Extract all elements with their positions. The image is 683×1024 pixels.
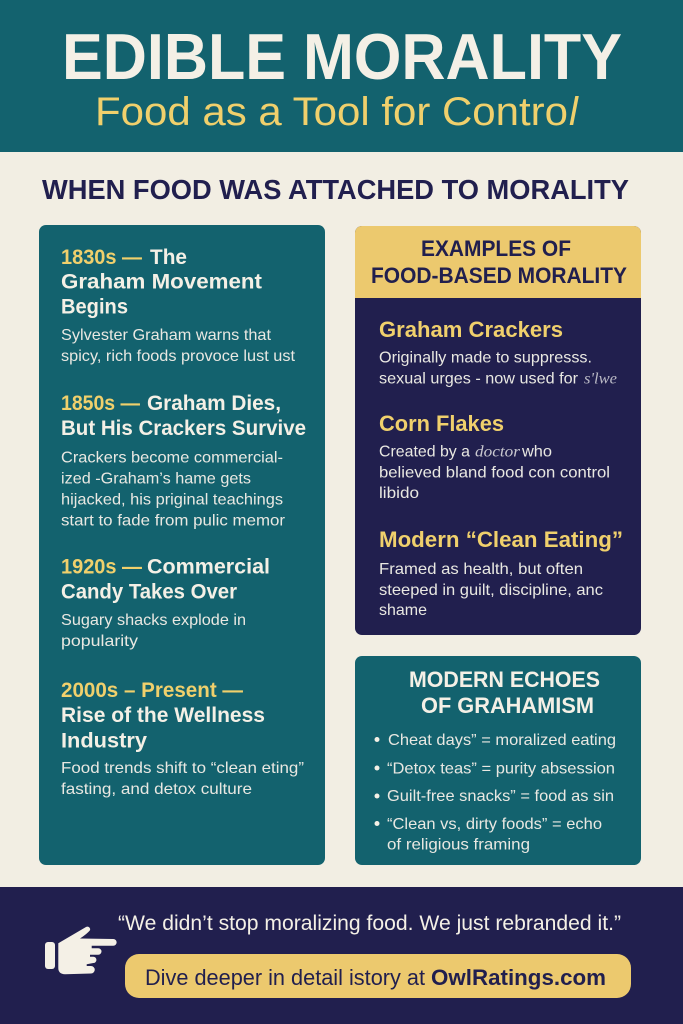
timeline entry: 1920s: Candy Takes Over <box>61 580 238 604</box>
timeline entry: 1850s <box>61 391 306 530</box>
timeline entry: 1850s: 1850s — <box>61 391 140 415</box>
echoes heading: OF GRAHAMISM <box>421 693 594 718</box>
header banner <box>0 0 683 152</box>
timeline entry: 2000s: Rise of the Wellness <box>61 703 265 727</box>
timeline entry: 2000s: Industry <box>61 728 147 752</box>
timeline entry: 1830s: The <box>150 245 187 269</box>
timeline entry: 1850s: But His Crackers Survive <box>61 416 306 440</box>
example: Graham Crackers: Graham Crackers <box>379 317 563 342</box>
example: Corn Flakes: who <box>521 444 552 460</box>
section heading: WHEN FOOD WAS ATTACHED TO MORALITY <box>42 174 629 205</box>
call to action button: Dive deeper in detail istory at <box>145 965 425 990</box>
examples heading: FOOD-BASED MORALITY <box>371 263 627 288</box>
subtitle: Food as a Tool for Contro <box>95 90 568 134</box>
footer band <box>0 887 683 1024</box>
timeline entry: 1850s: Graham Dies, <box>147 391 281 415</box>
timeline entry: 2000s: 2000s – Present — <box>61 678 243 702</box>
example: Corn Flakes: doctor <box>475 444 521 460</box>
timeline entry: 1830s: Graham Movement <box>61 270 262 294</box>
icon: pointing hand <box>45 927 117 974</box>
timeline entry: 1850s: ized -Graham’s hame gets <box>61 470 251 488</box>
timeline entry: 1850s: hijacked, his priginal teachings <box>61 492 283 508</box>
timeline entry: 1830s: Begins <box>61 294 128 318</box>
bullet list: “Detox teas” = purity absession <box>387 760 615 778</box>
panel: examples <box>355 226 641 635</box>
example: Graham Crackers: Originally made to suppresss. <box>379 350 592 366</box>
timeline entry: 1830s: Sylvester Graham warns that <box>61 327 272 344</box>
subtitle: l <box>569 90 579 134</box>
bullet list <box>374 732 616 854</box>
echoes heading: MODERN ECHOES <box>409 667 600 692</box>
panel: modern echoes <box>355 656 641 865</box>
timeline entry: 1830s: 1830s — <box>61 245 142 269</box>
bullet list: “Clean vs, dirty foods” = echo <box>387 816 602 833</box>
example: Modern Clean Eating: steeped in guilt, discipline, anc <box>379 582 603 599</box>
panel: timeline <box>39 225 325 865</box>
timeline entry: 1830s: spicy, rich foods provoce lust ust <box>61 348 296 365</box>
example: Graham Crackers <box>379 317 617 388</box>
bullet list: Cheat days” = moralized eating <box>388 732 616 749</box>
example: Corn Flakes: believed bland food con control <box>379 464 610 482</box>
bullet list: of religious framing <box>387 836 530 854</box>
example: Graham Crackers: s'lwe <box>584 370 617 388</box>
examples heading <box>371 236 627 288</box>
timeline entry: 1920s <box>61 554 270 650</box>
timeline entry: 1920s: 1920s — <box>61 554 142 578</box>
timeline entry: 2000s: fasting, and detox culture <box>61 781 252 798</box>
example: Modern Clean Eating: Framed as health, but often <box>379 561 583 578</box>
timeline entry: 2000s <box>61 678 304 798</box>
quote: “We didn’t stop moralizing food. We just rebranded it.” <box>118 912 621 935</box>
timeline entry: 2000s: Food trends shift to “clean eting” <box>61 760 304 777</box>
example: Modern Clean Eating: shame <box>379 602 427 619</box>
example: Corn Flakes: Created by a <box>379 444 470 460</box>
examples heading: EXAMPLES OF <box>421 236 571 261</box>
call to action button <box>125 954 631 998</box>
example: Graham Crackers: sexual urges - now used for <box>379 370 579 388</box>
timeline entry: 1850s: start to fade from pulic memor <box>61 512 286 530</box>
call to action button: OwlRatings.com <box>431 965 606 990</box>
echoes heading <box>409 667 600 718</box>
example: Corn Flakes <box>379 411 610 502</box>
bullet list: Guilt-free snacks” = food as sin <box>387 788 614 805</box>
timeline entry: 1920s: Sugary shacks explode in <box>61 612 246 629</box>
timeline entry: 1920s: popularity <box>61 633 138 650</box>
example: Modern Clean Eating: Modern “Clean Eating” <box>379 527 623 552</box>
example: Modern Clean Eating <box>379 527 623 619</box>
title: EDIBLE MORALITY <box>62 20 622 93</box>
example: Corn Flakes: Corn Flakes <box>379 411 504 436</box>
timeline entry: 1850s: Crackers become commercial- <box>61 450 283 466</box>
timeline entry: 1830s <box>61 245 296 365</box>
example: Corn Flakes: libido <box>379 485 419 502</box>
timeline entry: 1920s: Commercial <box>147 554 270 578</box>
